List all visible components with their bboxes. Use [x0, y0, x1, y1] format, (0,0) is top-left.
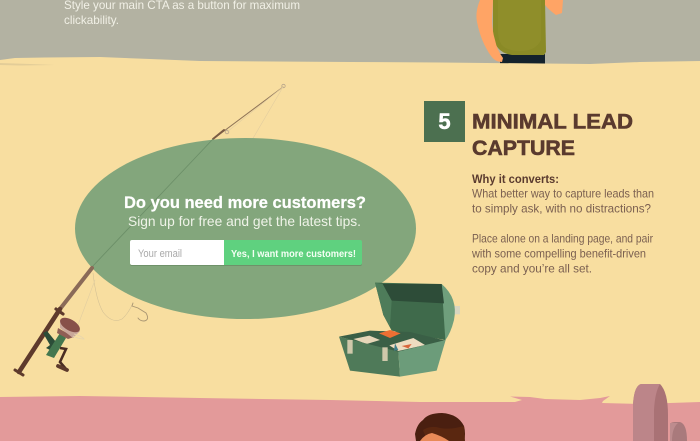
illustration: tackle box	[339, 283, 460, 377]
panel: pink section background	[0, 396, 700, 441]
heading: minimal lead capture	[472, 110, 633, 160]
heading: minimal lead capture: MINIMAL LEAD	[472, 110, 633, 134]
rod handle and reel	[15, 268, 92, 375]
illustration: character head	[415, 413, 465, 441]
number badge: 5: 5	[438, 109, 451, 134]
fishing rod	[78, 84, 285, 325]
illustration: character torso	[476, 0, 563, 66]
text: call to action tip: clickability.	[64, 13, 119, 27]
text: why it converts	[471, 172, 654, 276]
panel: sand section background	[0, 57, 700, 405]
signup headline: Do you need more customers?	[124, 193, 366, 212]
signup form: Yes, I want more customers!	[231, 248, 356, 260]
number badge: 5	[424, 101, 465, 142]
panel: green signup ellipse	[75, 138, 416, 319]
rod section seen through ellipse	[92, 139, 213, 267]
illustration: pink rock formation	[633, 384, 687, 441]
text: call to action tip	[64, 0, 300, 27]
panel: grey section background	[0, 0, 700, 70]
signup form: Your email	[138, 248, 182, 260]
text: why it converts: What better way to capture leads than	[472, 186, 654, 200]
signup form	[130, 240, 362, 266]
decorative brush streak	[0, 63, 55, 66]
text: why it converts: to simply ask, with no distractions?	[472, 202, 651, 216]
signup subheading: Sign up for free and get the latest tips.	[128, 213, 361, 229]
text: why it converts: Place alone on a landing page, and pair	[472, 232, 653, 246]
text: why it converts: with some compelling benefit-driven	[471, 246, 646, 260]
text: why it converts: Why it converts:	[472, 172, 559, 186]
heading: minimal lead capture: CAPTURE	[472, 136, 575, 160]
text: why it converts: copy and you’re all set.	[472, 262, 592, 276]
